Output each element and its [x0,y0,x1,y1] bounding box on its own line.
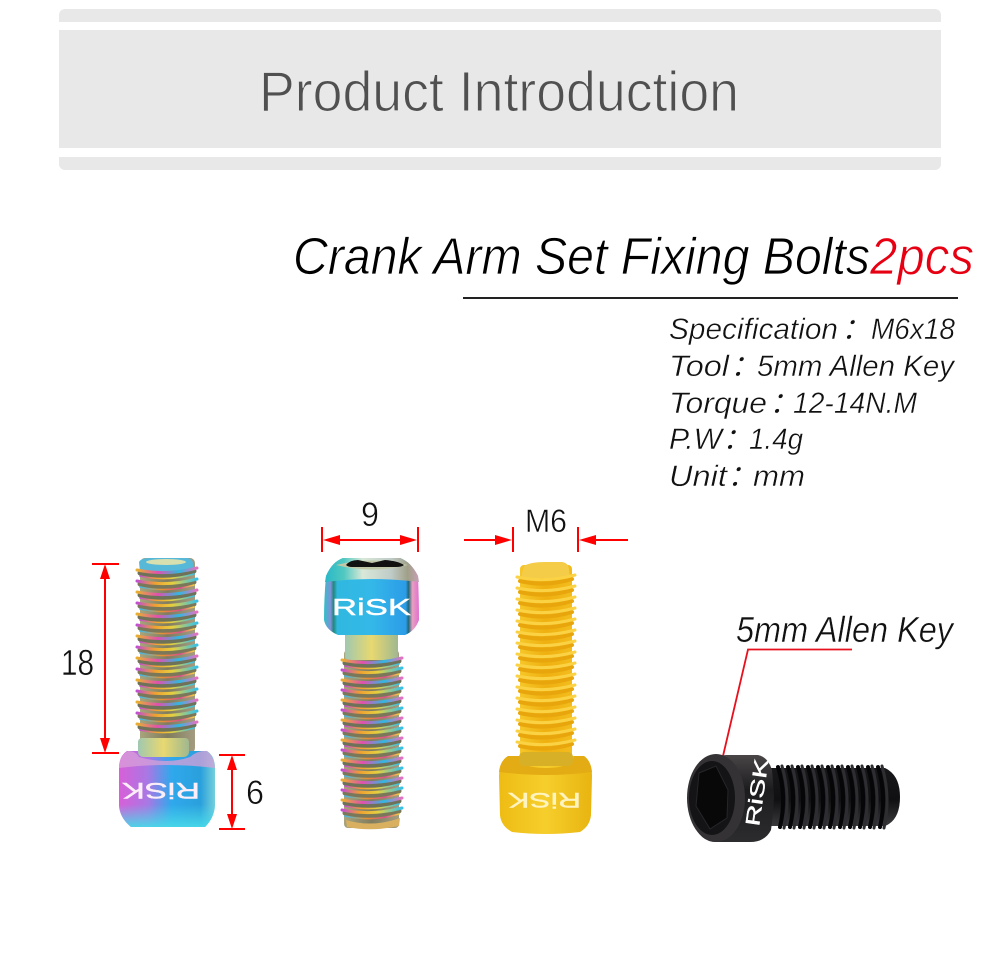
specification list: P.W [669,423,725,456]
specification list: 12-14N.M [793,387,917,420]
bolt 2: rainbow, head up [324,558,419,829]
dimension 18: 18 [61,642,94,683]
specification list: ： [769,387,799,420]
dimension 6: 6 [246,774,264,812]
bolt 1: rainbow, head down [119,558,215,827]
specification list: Tool [669,350,730,383]
logo on bolt 4 head: RiSK [742,756,774,828]
specification list: mm [753,460,805,493]
specification list: ： [730,350,760,383]
dimension 9: 9 [361,496,379,534]
specification list: 1.4g [749,423,803,456]
dimension 18 [61,563,119,754]
dimension M6: M6 [525,503,567,539]
hex socket [346,560,404,567]
product title: Crank Arm Set Fixing Bolts [293,228,870,286]
specification list: Torque [669,387,767,420]
title underline [463,297,958,299]
bolt 4: black [687,754,900,842]
dimension 6 [219,754,264,830]
logo on bolt 1 head: RiSK [121,778,200,803]
dimension M6 [464,503,628,552]
hex socket [696,766,728,829]
callout: 5mm Allen Key [723,609,955,756]
specification list: ： [722,423,752,456]
specification list: Specification [669,313,838,346]
specification list: ： [727,460,757,493]
specification list: 5mm Allen Key [757,350,956,383]
header banner [59,9,941,170]
logo on bolt 2 head: RiSK [332,594,412,620]
specification list: Unit [669,460,729,493]
logo on bolt 3 head: RiSK [508,788,581,811]
dimension 9 [321,496,419,552]
callout: 5mm Allen Key: 5mm Allen Key [736,609,955,650]
heading: Product Introduction: Product Introduction [259,60,739,124]
bolt 3: gold [499,562,592,834]
product title: 2pcs [869,228,974,286]
specification list: M6x18 [871,313,955,346]
specification list: ： [841,313,871,346]
specification list [669,313,956,493]
